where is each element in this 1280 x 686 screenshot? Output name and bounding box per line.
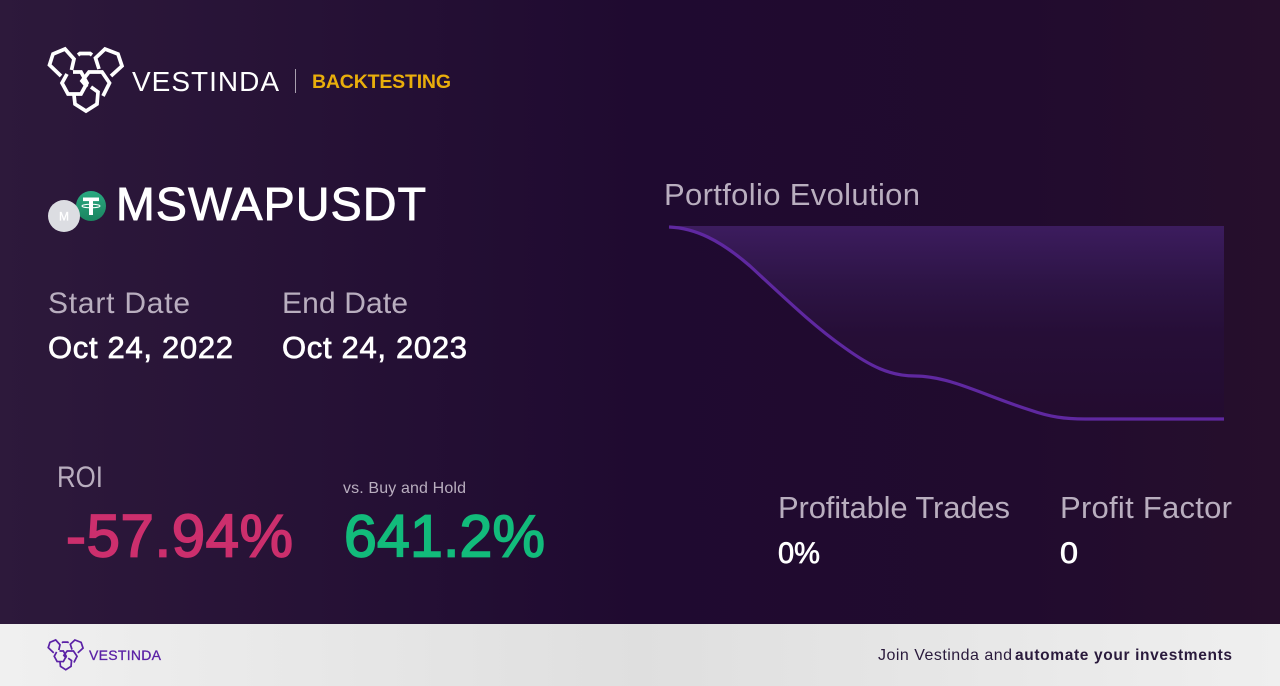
header divider	[295, 69, 296, 93]
buy and hold value: 641.2%	[344, 504, 545, 570]
section tag: BACKTESTING	[312, 71, 451, 93]
profitable trades value: 0%	[778, 537, 820, 570]
area fill	[669, 226, 1224, 419]
line	[669, 227, 1224, 419]
profit factor label: Profit Factor	[1060, 490, 1232, 525]
start date value: Oct 24, 2022	[48, 330, 233, 365]
portfolio evolution chart	[664, 177, 1224, 419]
buy and hold label: vs. Buy and Hold	[343, 480, 466, 497]
logo wordmark: VESTINDA	[132, 66, 279, 97]
icon: footer logo	[48, 640, 83, 670]
icon: Vestinda hexagon logo	[50, 49, 122, 111]
icon: USDT coin	[76, 191, 106, 221]
ROI statistics	[57, 461, 545, 570]
ROI value: -57.94%	[66, 502, 293, 570]
profit factor value: 0	[1060, 537, 1078, 570]
footer call to action emphasis: automate your investments	[1015, 647, 1232, 664]
start date label: Start Date	[48, 287, 190, 320]
trade statistics	[778, 490, 1232, 570]
ROI label: ROI	[57, 461, 103, 494]
icon: MSWAP coin: M	[59, 210, 69, 224]
icon: MSWAP coin	[48, 200, 80, 232]
date range	[48, 287, 467, 365]
chart heading: Portfolio Evolution	[664, 177, 920, 212]
footer bar	[0, 624, 1280, 686]
profitable trades label: Profitable Trades	[778, 490, 1010, 525]
end date label: End Date	[282, 287, 408, 320]
end date value: Oct 24, 2023	[282, 330, 467, 365]
header logo and section tag	[50, 49, 451, 111]
footer call to action: Join Vestinda and	[878, 647, 1012, 664]
pair title with coin icons	[48, 178, 426, 232]
pair name: MSWAPUSDT	[116, 178, 426, 230]
footer wordmark: VESTINDA	[89, 647, 162, 663]
